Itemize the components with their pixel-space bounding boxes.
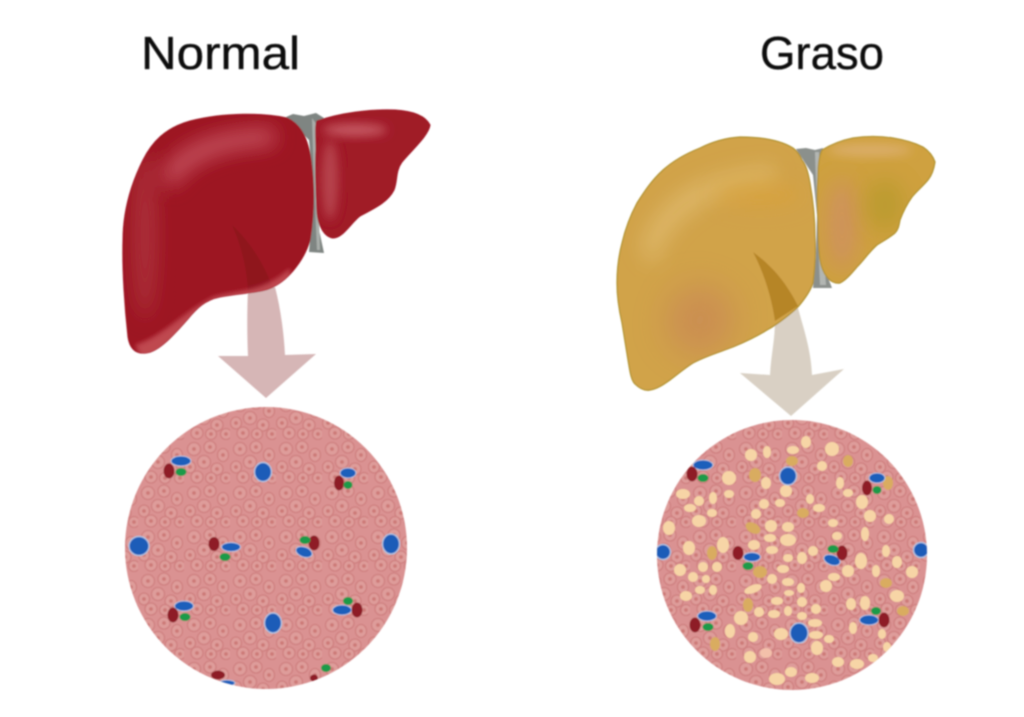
icon: normal liver [123, 110, 430, 365]
infographic canvas [121, 34, 937, 691]
fat droplets: tan [707, 455, 909, 651]
heading: Normal: Normal [141, 27, 300, 79]
triads: blue vessels [171, 456, 356, 686]
icon: fatty liver [617, 136, 935, 390]
big blue veins [656, 467, 928, 643]
tissue: fatty circle [650, 415, 935, 700]
big blue veins [129, 462, 400, 633]
triads: red vessels [164, 464, 362, 682]
arrow: liver to fatty tissue [740, 308, 844, 416]
panel: normal liver [120, 27, 430, 695]
panel: fatty liver [617, 27, 935, 700]
triads: green vessels [698, 474, 882, 631]
fat droplets: pale [663, 436, 918, 685]
triads: blue vessels [693, 460, 885, 625]
tissue: normal circle [120, 400, 415, 695]
triads: green vessels [176, 468, 353, 672]
arrow: liver to normal tissue [218, 287, 316, 398]
heading: Graso: Graso [760, 27, 884, 79]
triads: red vessels [686, 466, 890, 632]
